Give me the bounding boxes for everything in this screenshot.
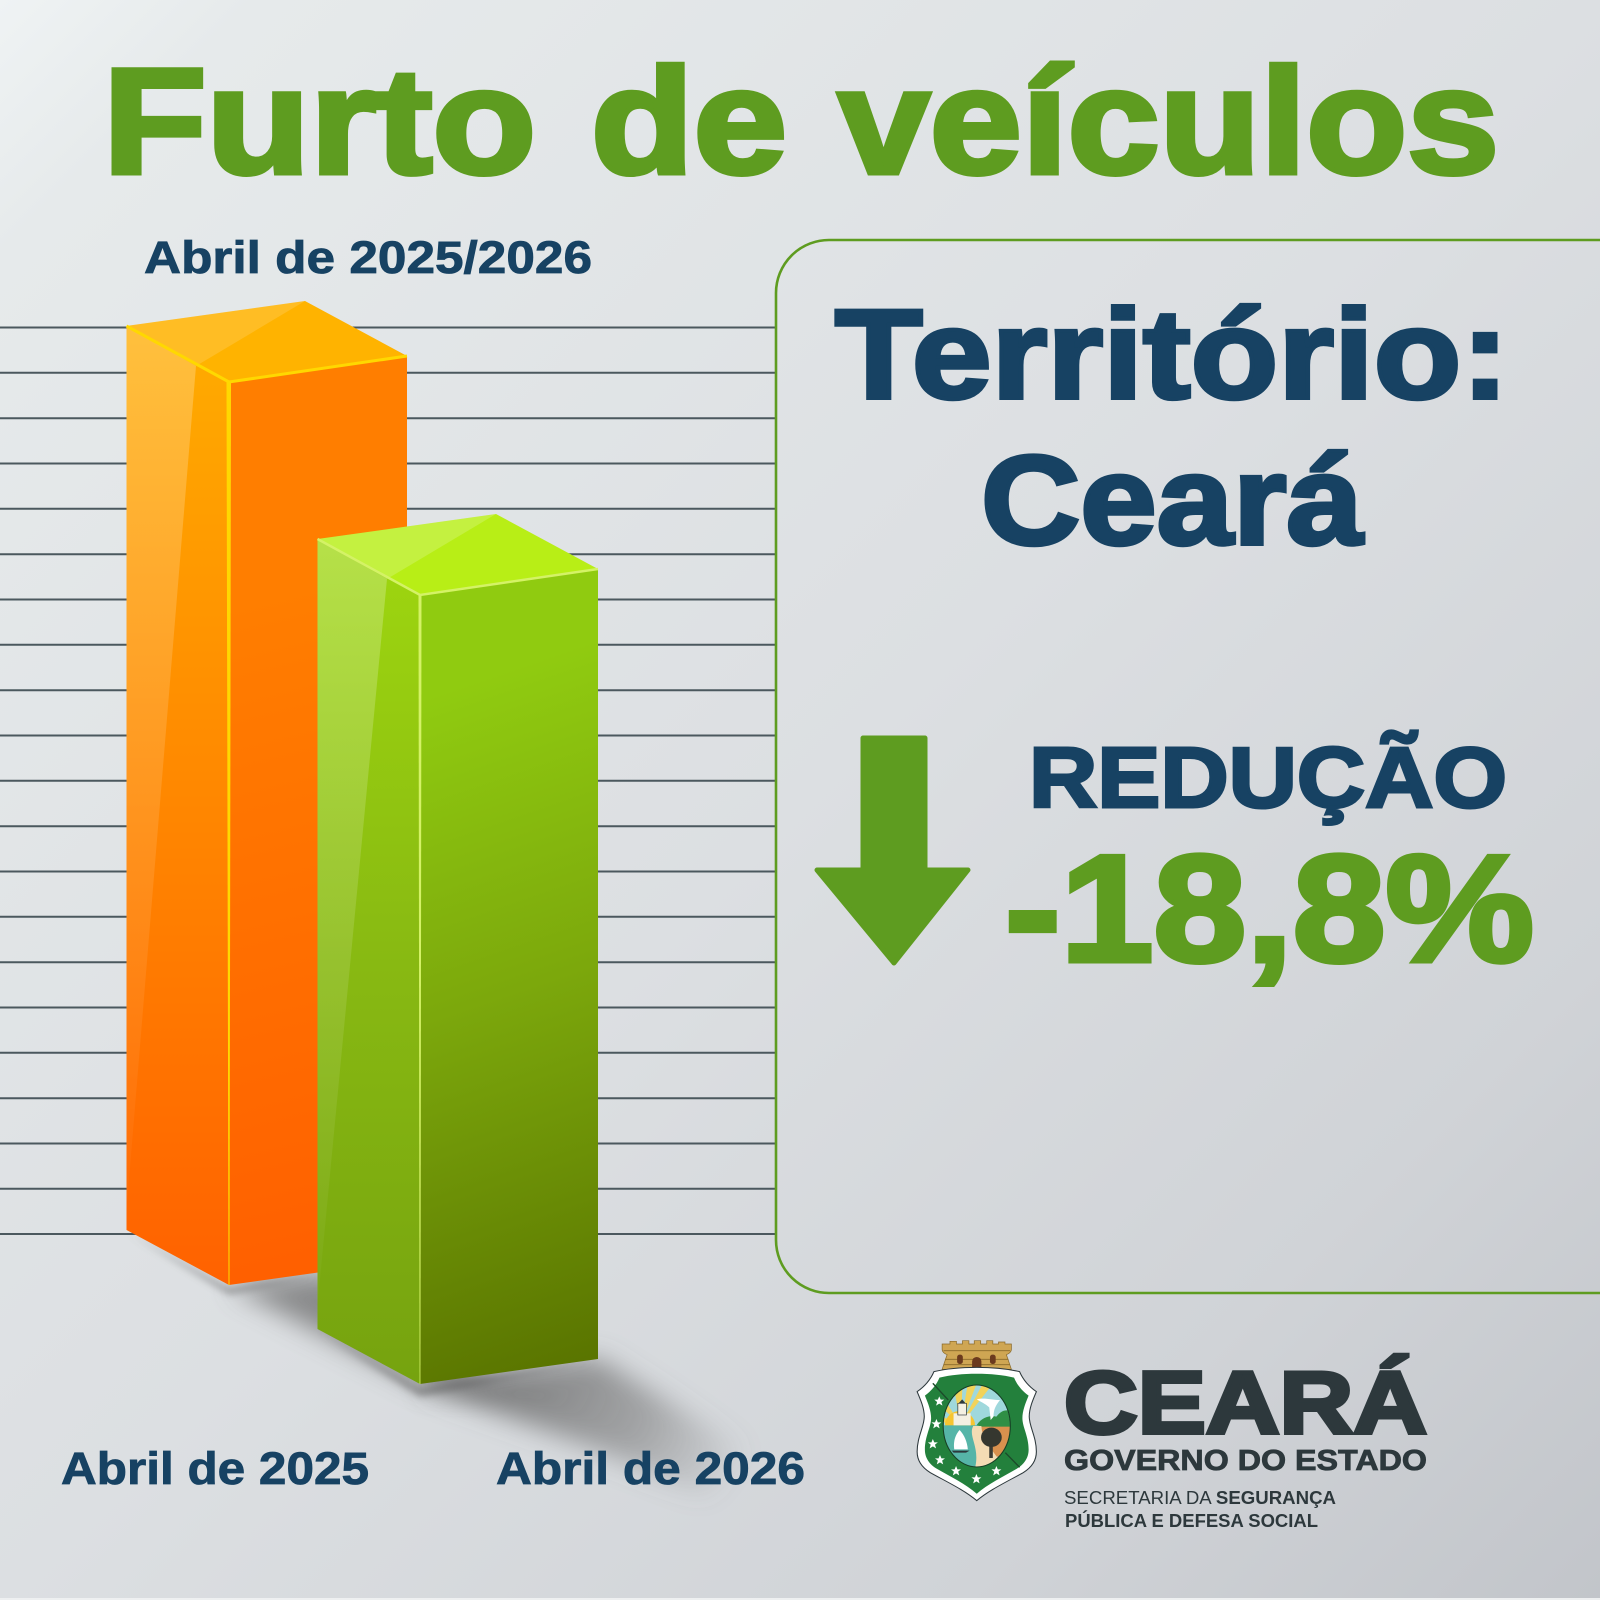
title: de	[591, 37, 787, 205]
crown	[942, 1341, 1011, 1369]
heading: Território: Território:	[835, 283, 1509, 425]
bar shadows	[128, 1232, 745, 1495]
panel: territory	[776, 240, 1600, 1293]
bar: Abril de 2026 (green)	[318, 514, 598, 1384]
axis label: Abril de 2026: Abril de 2026	[496, 1443, 805, 1494]
chart period label: Abril de 2025/2026	[144, 232, 592, 283]
icon: down arrow	[817, 738, 968, 963]
title	[103, 37, 1499, 205]
heading: Ceará: Ceará	[981, 429, 1363, 571]
logo: Governo do Ceará	[917, 1341, 1427, 1531]
logo wordmark: Ceará: CEARÁ	[1064, 1353, 1427, 1452]
bar: Abril de 2025 (orange)	[126, 301, 407, 1285]
logo text: secretaria line 1: SECRETARIA DA SEGURANÇA	[1064, 1488, 1336, 1508]
axis label: Abril de 2025: Abril de 2025	[61, 1443, 369, 1494]
logo text: secretaria line 2: PÚBLICA E DEFESA SOCIAL	[1065, 1510, 1318, 1531]
chart grid lines	[0, 328, 775, 1234]
value: -18,8%: -18,8%	[1005, 824, 1534, 994]
label: redução: REDUÇÃO	[1029, 730, 1507, 826]
title: Furto	[103, 37, 536, 205]
logo subtitle: Governo do Estado: GOVERNO DO ESTADO	[1064, 1445, 1427, 1477]
icon: state coat of arms	[917, 1341, 1036, 1501]
title: veículos	[838, 37, 1499, 205]
